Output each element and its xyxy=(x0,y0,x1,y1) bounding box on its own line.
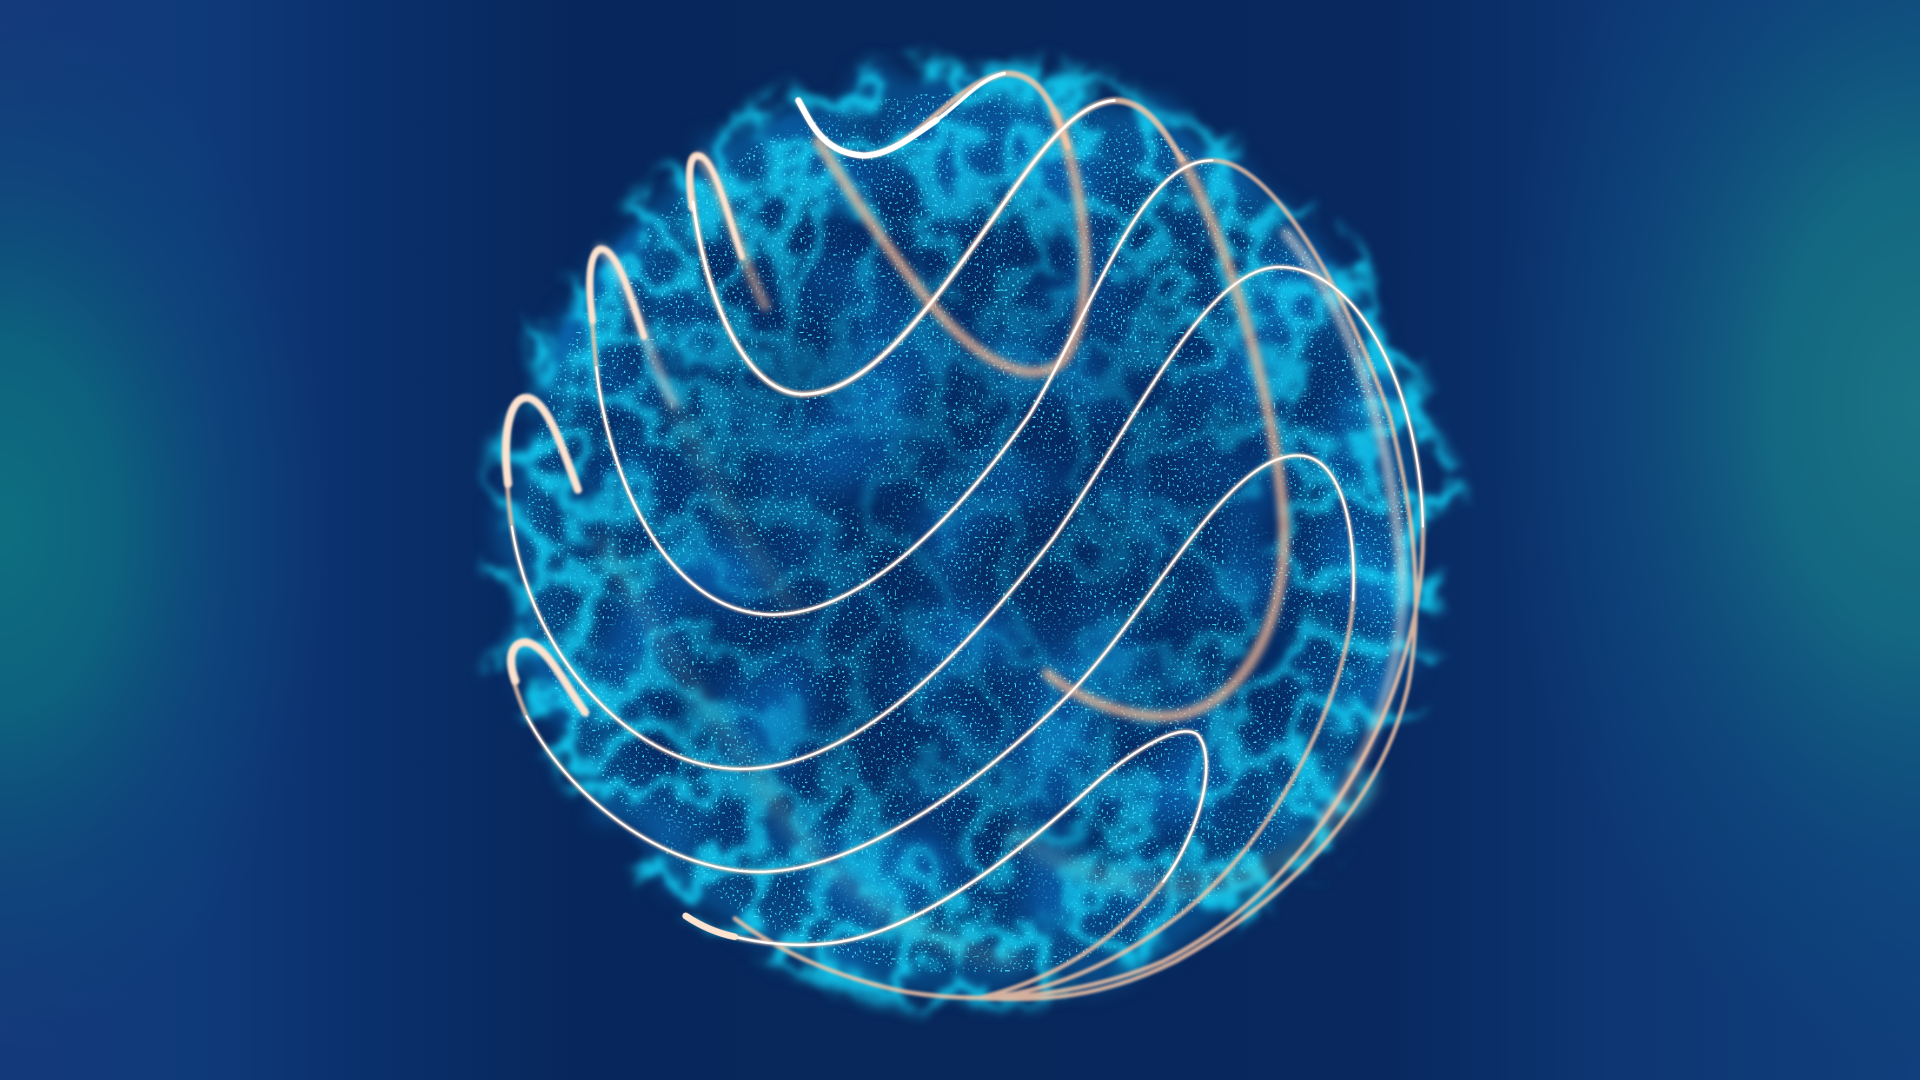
sphere of particles xyxy=(492,58,1442,1008)
ribbon glow xyxy=(507,73,1423,999)
glowing cyan clusters xyxy=(492,58,1442,1008)
fine particle dust xyxy=(527,92,1408,973)
sphere body xyxy=(512,77,1423,988)
blurred far-side ribbons xyxy=(600,113,1402,961)
soft blue glow patches xyxy=(514,80,1420,986)
ribbon loops: thick peach tips xyxy=(506,156,742,713)
white ribbon core lines xyxy=(512,73,1423,945)
